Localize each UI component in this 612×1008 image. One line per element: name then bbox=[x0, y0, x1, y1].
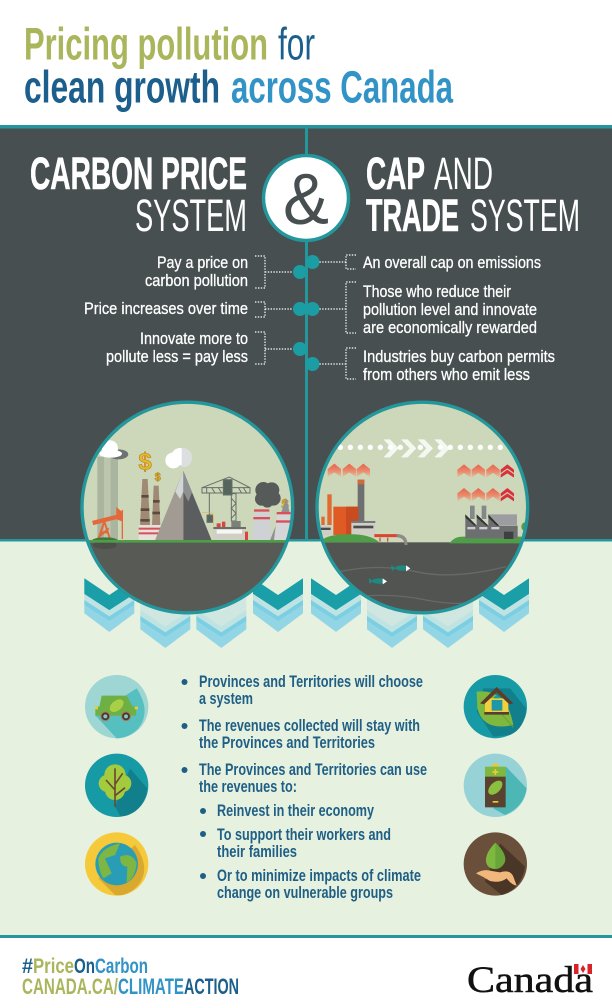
permit trade dotted arrow bbox=[338, 439, 503, 457]
dollar signs: $ bbox=[155, 471, 161, 483]
bulleted text: The revenues collected will stay with bbox=[199, 717, 420, 735]
title: across Canada bbox=[231, 62, 454, 112]
cloud over mountain bbox=[165, 448, 192, 468]
panel: dark comparison background bbox=[0, 125, 612, 541]
dollar signs: $ bbox=[138, 449, 152, 476]
central vertical divider bbox=[305, 127, 308, 540]
water waves bbox=[339, 567, 513, 603]
timeline dots bbox=[293, 255, 320, 371]
icon: green car bbox=[85, 675, 148, 738]
carbon price feature list: carbon pollution bbox=[145, 271, 248, 290]
emission chevrons right bbox=[457, 464, 514, 501]
bulleted text: change on vulnerable groups bbox=[217, 884, 393, 902]
teal rule at section change bbox=[0, 539, 612, 542]
carbon price feature list: Innovate more to bbox=[140, 329, 248, 348]
bulleted text: the Provinces and Territories bbox=[199, 734, 375, 752]
bulleted text: the revenues to: bbox=[199, 778, 297, 796]
footer hashtag: # bbox=[22, 955, 33, 978]
ampersand badge bbox=[264, 156, 348, 240]
brown chimneys bbox=[139, 479, 161, 540]
icon: earth bbox=[85, 832, 148, 896]
icon: hand holding leaf bbox=[464, 832, 527, 896]
heading: carbon price system: CARBON PRICE bbox=[30, 148, 247, 199]
illustration: cap and trade scene bbox=[315, 400, 530, 614]
dollar signs bbox=[138, 449, 289, 512]
heading: cap and trade system: TRADE bbox=[366, 190, 459, 241]
cap and trade feature list: from others who emit less bbox=[363, 365, 530, 384]
cap and trade feature list: pollution level and innovate bbox=[363, 300, 537, 319]
cap and trade feature list: Those who reduce their bbox=[363, 282, 511, 301]
title: clean growth bbox=[24, 62, 220, 112]
carbon price feature list: pollute less = pay less bbox=[106, 347, 248, 366]
emission chevrons left bbox=[328, 464, 370, 477]
bulleted text: their families bbox=[217, 843, 297, 861]
panel: top teal rule bbox=[0, 125, 612, 128]
footer hashtag: Carbon bbox=[95, 955, 148, 978]
bulleted text: To support their workers and bbox=[217, 826, 391, 844]
heading: cap and trade system bbox=[366, 148, 580, 241]
title: for bbox=[278, 18, 315, 70]
bulleted text: a system bbox=[199, 690, 253, 708]
footer url: CLIMATE bbox=[118, 974, 184, 999]
pumpjack bbox=[92, 508, 122, 549]
dotted connectors bbox=[255, 255, 356, 379]
footer url bbox=[22, 974, 239, 999]
carbon price feature list: Price increases over time bbox=[84, 299, 248, 318]
icon: tree bbox=[85, 754, 148, 817]
crane bbox=[202, 477, 250, 522]
footer url: CANADA.CA/ bbox=[22, 974, 118, 999]
left factory bbox=[319, 480, 406, 545]
cap and trade feature list: Industries buy carbon permits bbox=[363, 347, 555, 366]
bulleted text bbox=[182, 673, 427, 902]
footer hashtag bbox=[22, 955, 148, 978]
illustration: carbon price scene bbox=[80, 400, 294, 614]
bulleted text: Or to minimize impacts of climate bbox=[217, 867, 421, 885]
heading: cap and trade system: CAP bbox=[366, 148, 425, 199]
bulleted text: Provinces and Territories will choose bbox=[199, 673, 423, 691]
footer hashtag: Price bbox=[33, 955, 74, 978]
heading: carbon price system: SYSTEM bbox=[135, 190, 247, 241]
smoke columns bbox=[97, 457, 118, 540]
clouds at smoke columns bbox=[99, 440, 128, 459]
cooling towers and smoke bbox=[252, 482, 295, 540]
right factory bbox=[449, 506, 531, 543]
icon: battery bbox=[464, 754, 527, 817]
ampersand badge: & bbox=[283, 160, 329, 240]
chevron bands bbox=[84, 578, 529, 648]
heading: cap and trade system: AND bbox=[434, 148, 493, 199]
cap and trade feature list bbox=[363, 253, 555, 384]
carbon price feature list: Pay a price on bbox=[157, 253, 248, 272]
fish bbox=[369, 565, 410, 584]
title: Pricing pollution bbox=[24, 18, 268, 70]
cap and trade feature list: An overall cap on emissions bbox=[363, 253, 541, 272]
footer hashtag: On bbox=[74, 955, 95, 978]
bulleted text: The Provinces and Territories can use bbox=[199, 761, 427, 779]
icon: house on leaf bbox=[464, 675, 527, 738]
panel: light green lower background bbox=[0, 539, 612, 935]
carbon price feature list bbox=[84, 253, 248, 366]
dollar signs: $ bbox=[281, 498, 289, 512]
footer url: ACTION bbox=[184, 974, 239, 999]
title bbox=[24, 18, 454, 112]
footer teal rule bbox=[0, 935, 612, 938]
bulleted text: Reinvest in their economy bbox=[217, 802, 375, 820]
small factory bbox=[202, 512, 248, 540]
Canada wordmark: Canada bbox=[467, 960, 593, 1001]
heading: carbon price system bbox=[30, 148, 247, 241]
cap and trade feature list: are economically rewarded bbox=[363, 318, 537, 337]
mountain bbox=[155, 471, 212, 540]
